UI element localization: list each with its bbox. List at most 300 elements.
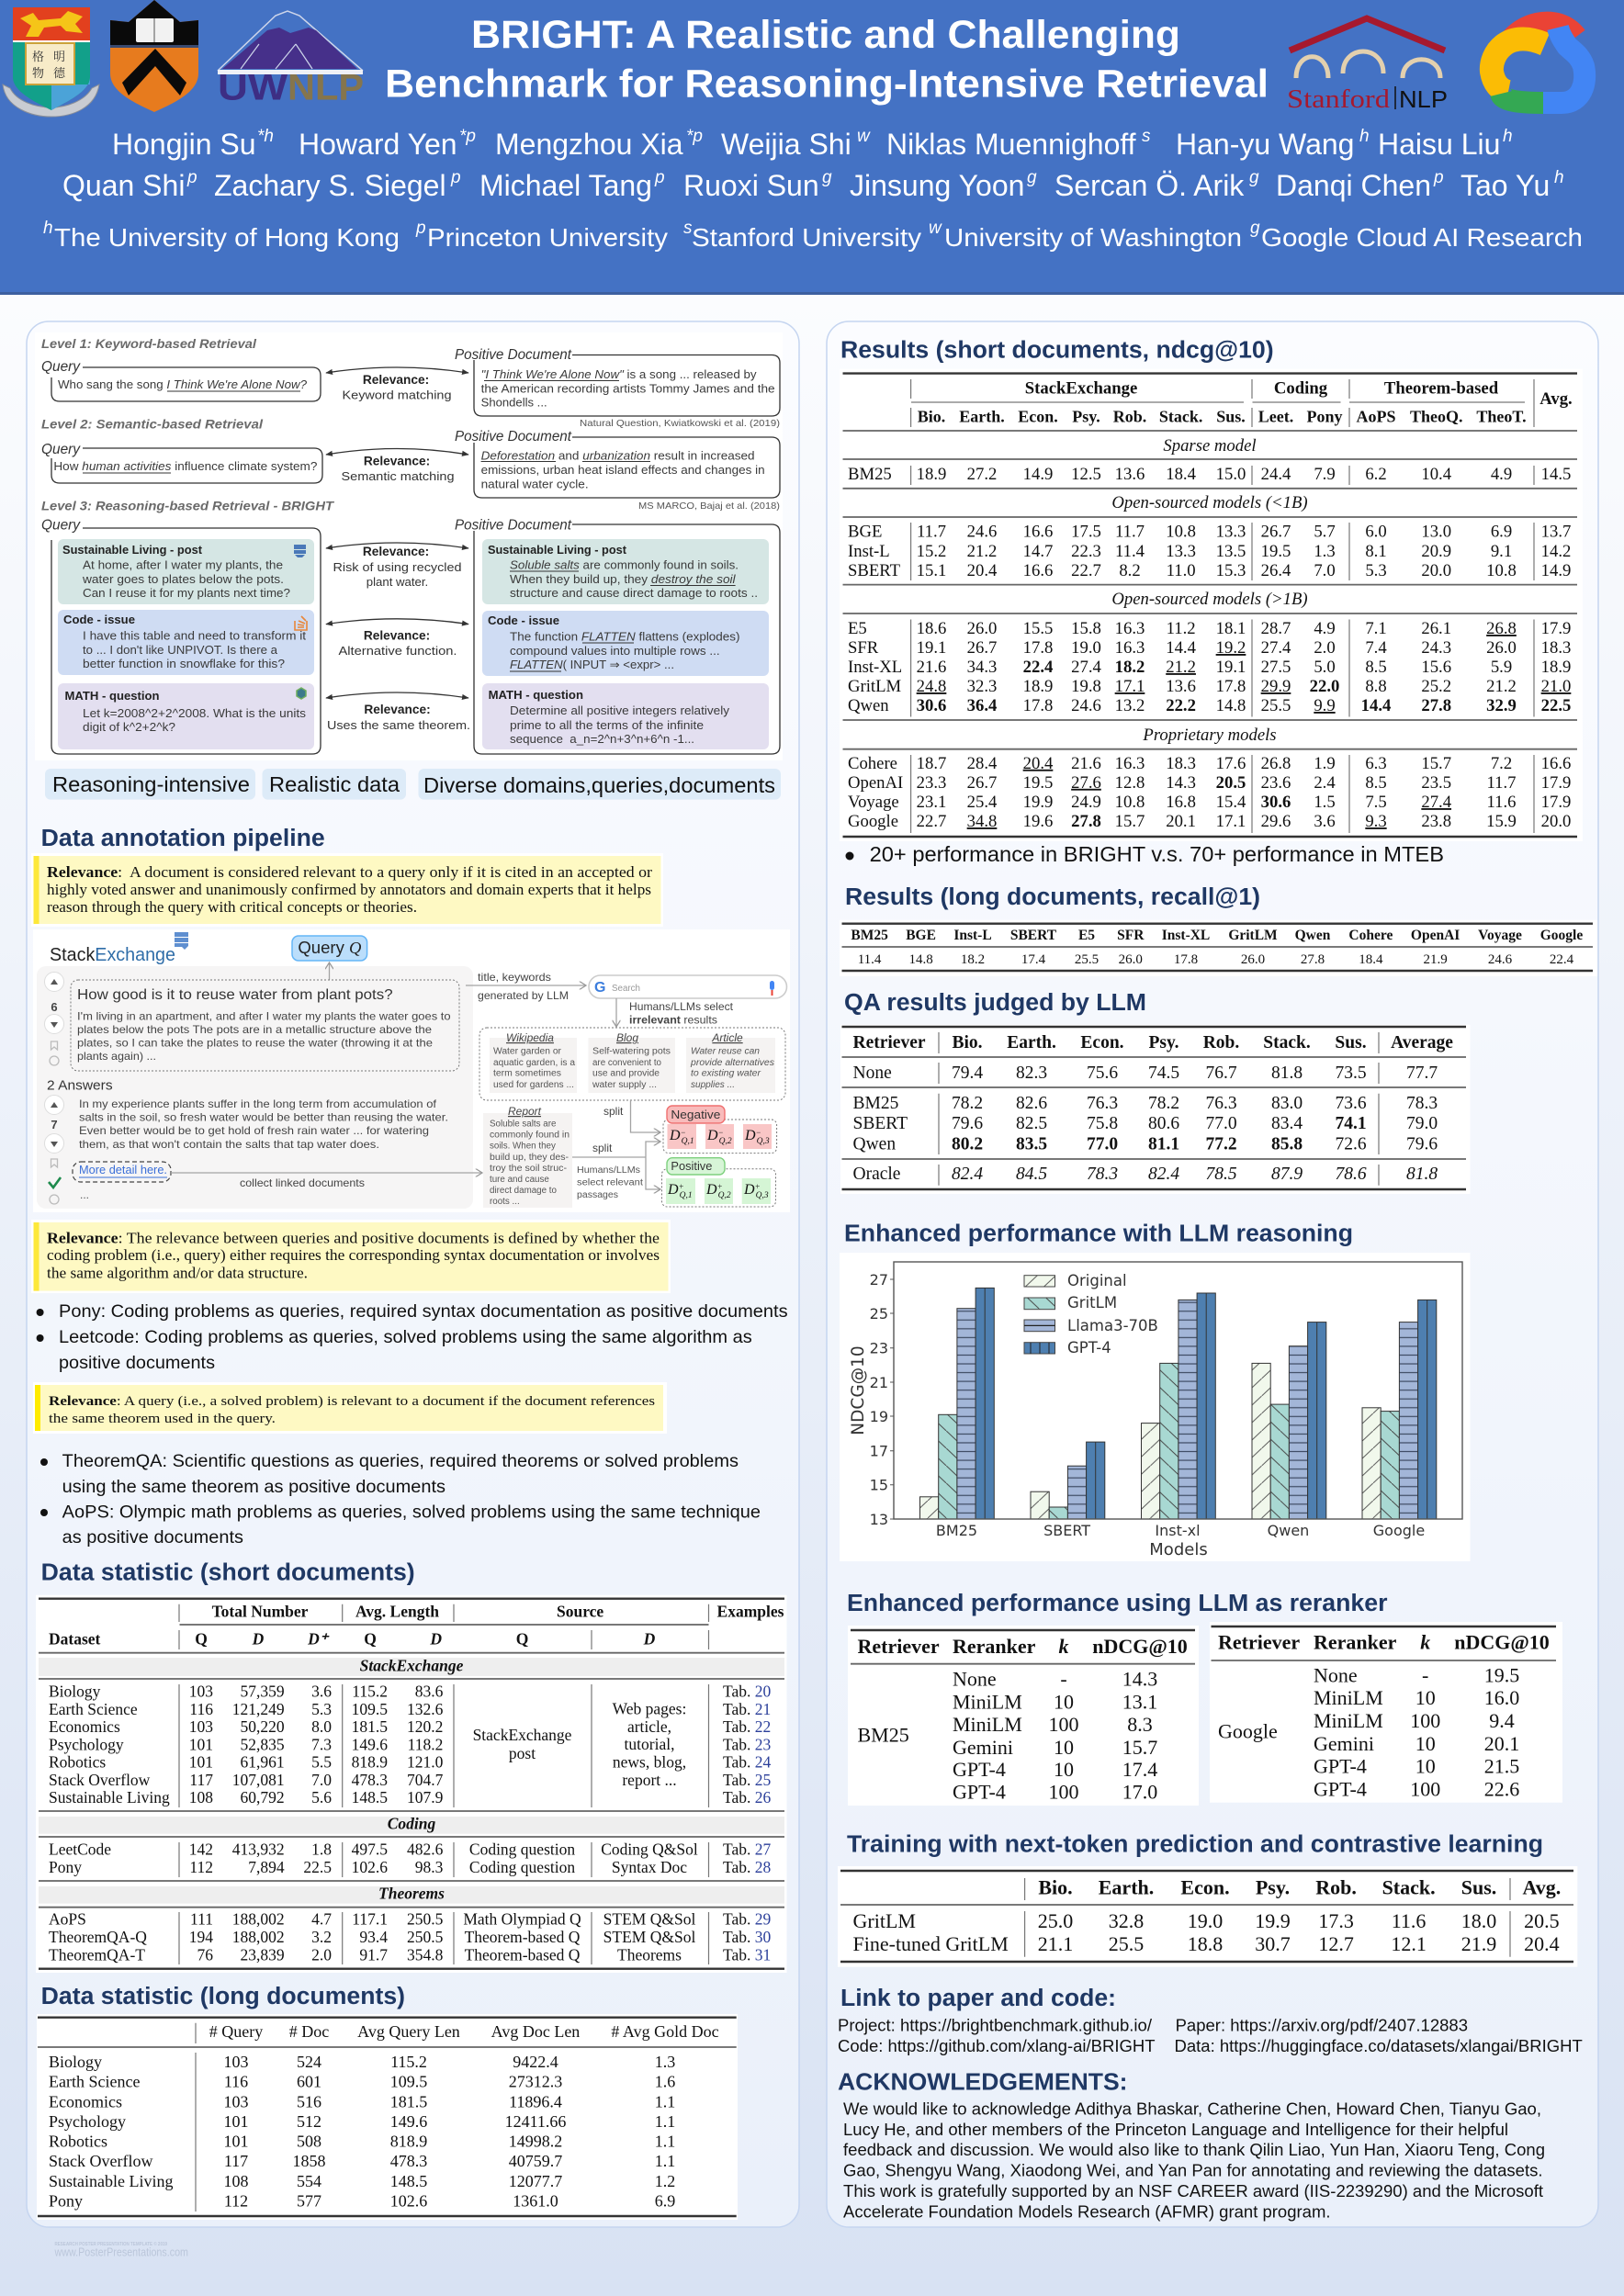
query card: code issue: better function in snowflake for this? xyxy=(83,658,285,670)
table: Google reranker: - xyxy=(1422,1664,1428,1687)
row: BM25: 24.4 xyxy=(1261,465,1291,484)
table: results short documents ndcg@10: Theorem-based xyxy=(1384,378,1499,399)
rows: proprietary models: 15.4 xyxy=(1216,793,1246,812)
level 2: MS MARCO, Bajaj et al. (2018) xyxy=(638,501,780,512)
level 3: Level 3: Reasoning-based Retrieval - BRIGHT xyxy=(41,498,335,512)
table: Google reranker: 100 xyxy=(1410,1778,1440,1801)
level 2: Positive Document xyxy=(455,429,572,445)
bullets: TheoremQA and AoPS xyxy=(40,1451,761,1548)
rows: proprietary models: 1.5 xyxy=(1314,793,1336,812)
table: BM25 reranker: 15.7 xyxy=(1122,1736,1157,1759)
table: BM25 reranker: MiniLM xyxy=(953,1713,1022,1736)
rows: proprietary models: Cohere xyxy=(848,754,897,773)
rows: proprietary models: 9.3 xyxy=(1365,812,1387,831)
rows: coding datasets: Coding question xyxy=(469,1858,575,1876)
document card: sustainable living: structure and cause direct damage to roots .. xyxy=(510,587,758,600)
rows: open-sourced models over 1B: 14.8 xyxy=(1216,696,1246,715)
table: data statistic long documents: 14998.2 xyxy=(509,2133,562,2151)
table: QA results judged by LLM: 80.2 xyxy=(952,1135,983,1154)
rows: StackExchange datasets xyxy=(49,1683,772,1806)
rows: proprietary models: 27.4 xyxy=(1421,793,1452,812)
table: data statistic long documents: 601 xyxy=(297,2073,321,2091)
positive documents: D xyxy=(706,1182,717,1198)
table: results long documents recall@1: Voyage xyxy=(1478,928,1522,943)
table: results long documents recall@1: 22.4 xyxy=(1550,952,1574,967)
table: Google reranker: MiniLM xyxy=(1314,1686,1383,1709)
table: QA results judged by LLM: Sus. xyxy=(1335,1033,1367,1052)
rows: coding datasets: 22.5 xyxy=(303,1858,332,1876)
table: data statistic long documents: Stack Overflow xyxy=(49,2152,152,2170)
rows: StackExchange datasets: 478.3 xyxy=(352,1771,388,1789)
table: Google reranker: Reranker xyxy=(1314,1631,1397,1654)
rows: open-sourced models over 1B: 18.6 xyxy=(917,619,946,638)
table: BM25 reranker xyxy=(848,1626,1199,1806)
rows: StackExchange datasets: Web pages: xyxy=(613,1700,686,1718)
rows: StackExchange datasets: tutorial, xyxy=(625,1735,674,1753)
callout: relevance definition: highly voted answer and unanimously confirmed by annotators and domain experts that it helps xyxy=(47,881,651,898)
rows: open-sourced models over 1B: 15.8 xyxy=(1071,619,1101,638)
heading: links: Link to paper and code: xyxy=(840,1986,1116,2011)
x axis: Google xyxy=(1373,1522,1425,1539)
rows: open-sourced models over 1B: Qwen xyxy=(848,696,889,715)
table: data statistic long documents: 512 xyxy=(297,2112,321,2131)
table: Google reranker xyxy=(1210,1622,1562,1803)
table: results long documents recall@1: Inst-L xyxy=(953,928,992,943)
title: Benchmark for Reasoning-Intensive Retrieval xyxy=(385,62,1269,107)
rows: open-sourced models under 1B: 11.0 xyxy=(1167,561,1196,580)
table: QA results judged by LLM: 75.8 xyxy=(1087,1114,1118,1133)
rows: proprietary models: 7.5 xyxy=(1365,793,1387,812)
rows: proprietary models: 25.4 xyxy=(967,793,998,812)
irrelevant results: used for gardens ... xyxy=(493,1080,574,1090)
query card: sustainable living: Can I reuse it for my plants next time? xyxy=(83,587,290,600)
rows: open-sourced models under 1B: 26.7 xyxy=(1261,523,1291,542)
answers: them, as that won't contain the salts that tap water does. xyxy=(79,1138,379,1151)
rows: theorem datasets: 117.1 xyxy=(352,1910,388,1929)
rows: open-sourced models under 1B: 13.3 xyxy=(1216,523,1246,542)
table: QA results judged by LLM: 83.4 xyxy=(1271,1114,1303,1133)
rows: proprietary models: 29.6 xyxy=(1261,812,1291,831)
rows: StackExchange datasets: Tab. 26 xyxy=(723,1788,772,1806)
authors line 2: p xyxy=(654,168,665,187)
rows: proprietary models: 17.1 xyxy=(1216,812,1246,831)
table: data statistic long documents: 148.5 xyxy=(390,2172,427,2190)
table: Google reranker: MiniLM xyxy=(1314,1709,1383,1732)
rows: coding datasets: Syntax Doc xyxy=(612,1858,687,1876)
rows: open-sourced models under 1B: 5.7 xyxy=(1314,523,1336,542)
table: QA results judged by LLM: BM25 xyxy=(852,1094,898,1113)
rows: open-sourced models over 1B: 13.2 xyxy=(1115,696,1145,715)
relevance: recycled water xyxy=(326,543,468,589)
table: training comparison: Earth. xyxy=(1099,1876,1154,1899)
rows: proprietary models: 20.0 xyxy=(1541,812,1571,831)
rows: coding datasets: 102.6 xyxy=(352,1858,388,1876)
table: training comparison: 18.0 xyxy=(1461,1909,1496,1932)
level 1: Who sang the song I Think We're Alone Now? xyxy=(58,378,307,391)
table: data statistic long documents: 9422.4 xyxy=(513,2053,558,2071)
table: Google reranker: 16.0 xyxy=(1484,1686,1519,1709)
rows: StackExchange datasets: 8.0 xyxy=(311,1717,332,1736)
rows: open-sourced models over 1B: 26.0 xyxy=(1486,638,1517,658)
table: data statistic short documents: D xyxy=(429,1630,442,1649)
row: BM25: 10.4 xyxy=(1421,465,1452,484)
rows: open-sourced models over 1B: 26.8 xyxy=(1486,619,1517,638)
rows: theorem datasets: 23,839 xyxy=(240,1945,285,1964)
authors line 1 xyxy=(112,127,1513,161)
table: QA results judged by LLM: 77.7 xyxy=(1406,1064,1438,1083)
table: QA results judged by LLM: Bio. xyxy=(952,1033,983,1052)
rows: open-sourced models over 1B: 24.6 xyxy=(1071,696,1101,715)
table: QA results judged by LLM: 77.0 xyxy=(1087,1135,1118,1154)
rows: proprietary models: 10.8 xyxy=(1115,793,1145,812)
figure: annotation pipeline xyxy=(33,929,790,1212)
rows: open-sourced models over 1B: 19.0 xyxy=(1071,638,1101,658)
rows: open-sourced models over 1B: 18.2 xyxy=(1115,658,1145,677)
rows: StackExchange datasets: Tab. 23 xyxy=(723,1735,772,1753)
header banner xyxy=(0,0,1624,295)
rows: open-sourced models under 1B: 11.7 xyxy=(917,523,946,542)
table: results short documents ndcg@10 xyxy=(840,369,1583,841)
logo: Stanford NLP xyxy=(1287,18,1448,114)
rows: StackExchange datasets: 121.0 xyxy=(407,1753,444,1772)
negative documents: Negative xyxy=(671,1108,720,1121)
heading: results long documents: Results (long documents, recall@1) xyxy=(845,884,1260,910)
vote controls: 7 xyxy=(51,1118,58,1131)
logo: UW NLP: UW xyxy=(218,68,288,108)
query card: math question: MATH - question xyxy=(64,690,160,703)
y axis: 21 xyxy=(870,1374,888,1391)
table: results short documents ndcg@10: StackExchange xyxy=(1025,378,1137,399)
search step xyxy=(466,971,786,1027)
rows: proprietary models: 16.3 xyxy=(1115,754,1145,773)
rows: open-sourced models over 1B: 9.9 xyxy=(1314,696,1336,715)
table: data statistic long documents: 6.9 xyxy=(655,2192,675,2211)
rows: StackExchange datasets: 5.6 xyxy=(311,1788,332,1806)
heading: LLM reranker: Enhanced performance using LLM as reranker xyxy=(847,1591,1388,1616)
rows: open-sourced models over 1B: 17.1 xyxy=(1115,677,1145,696)
authors line 1: Howard Yen xyxy=(299,128,457,161)
table: QA results judged by LLM: 76.7 xyxy=(1205,1064,1237,1083)
authors line 2: Jinsung Yoon xyxy=(850,169,1024,202)
table: data statistic short documents: Q xyxy=(195,1630,208,1649)
table: data statistic long documents: 102.6 xyxy=(390,2192,427,2211)
logo: Stanford NLP: Stanford xyxy=(1287,85,1390,114)
table: training comparison: Fine-tuned GritLM xyxy=(852,1932,1009,1955)
negative documents: − xyxy=(681,1128,686,1137)
rows: open-sourced models under 1B: 24.6 xyxy=(967,523,997,542)
rows: proprietary models: Voyage xyxy=(848,793,899,812)
table: data statistic long documents: 101 xyxy=(224,2133,248,2151)
authors line 2: Danqi Chen xyxy=(1276,169,1431,202)
bars: BM25 xyxy=(920,1288,994,1519)
table: Google reranker: GPT-4 xyxy=(1314,1755,1367,1778)
rows: StackExchange datasets: 3.6 xyxy=(311,1683,332,1701)
table: data statistic long documents: # Doc xyxy=(289,2022,329,2041)
table: results short documents ndcg@10: Proprietary models xyxy=(1142,726,1277,745)
table: training comparison: 18.8 xyxy=(1188,1932,1223,1955)
table: QA results judged by LLM: SBERT xyxy=(852,1114,908,1133)
tag: reasoning-intensive: Reasoning-intensive xyxy=(52,772,250,796)
table: data statistic short documents: StackExchange xyxy=(360,1656,464,1674)
rows: proprietary models: 27.8 xyxy=(1071,812,1101,831)
report document xyxy=(483,1105,572,1208)
callout: relevance definition xyxy=(31,853,663,927)
table: data statistic short documents: D⁺ xyxy=(307,1630,330,1649)
figure: three levels of retrieval xyxy=(35,332,783,760)
report document: soils. When they xyxy=(490,1142,556,1152)
negative documents: − xyxy=(756,1128,761,1137)
authors line 1: s xyxy=(1142,127,1151,146)
rows: proprietary models: 19.6 xyxy=(1023,812,1053,831)
rows: open-sourced models over 1B: 22.4 xyxy=(1023,658,1053,677)
table: BM25 reranker: 17.4 xyxy=(1122,1758,1157,1781)
table: training comparison: 25.0 xyxy=(1038,1909,1073,1932)
table: Google reranker: Google xyxy=(1218,1720,1278,1743)
table: training comparison: 20.4 xyxy=(1524,1932,1560,1955)
acknowledgements text: We would like to acknowledge Adithya Bhaskar, Catherine Chen, Howard Chen, Tianyu Gao, xyxy=(843,2099,1541,2119)
x axis xyxy=(936,1522,1425,1559)
document card: math question: sequence a_n=2^n+3^n+6^n -1... xyxy=(510,733,694,746)
rows: theorem datasets: Theorem-based Q xyxy=(465,1928,581,1946)
table: QA results judged by LLM: 83.5 xyxy=(1016,1135,1047,1154)
rows: theorem datasets: 76 xyxy=(197,1945,213,1964)
question post: How good is it to reuse water from plant pots? xyxy=(77,987,393,1003)
table: training comparison: Bio. xyxy=(1038,1876,1073,1899)
table: data statistic long documents: 116 xyxy=(224,2073,248,2091)
table: Google reranker: nDCG@10 xyxy=(1454,1631,1550,1654)
legend: GritLM xyxy=(1067,1294,1117,1311)
table: QA results judged by LLM: 81.8 xyxy=(1271,1064,1303,1083)
table: training comparison: Stack. xyxy=(1382,1876,1436,1899)
table: results long documents recall@1: Cohere xyxy=(1348,928,1393,943)
document card: code issue xyxy=(482,611,769,676)
irrelevant results: Wikipedia xyxy=(506,1031,554,1044)
answers: In my experience plants suffer in the long term from accumulation of xyxy=(79,1097,437,1110)
rows: open-sourced models under 1B: 14.7 xyxy=(1023,542,1053,561)
rows: StackExchange datasets: 103 xyxy=(189,1717,213,1736)
level 1 xyxy=(41,336,780,429)
table: QA results judged by LLM: 79.6 xyxy=(952,1114,983,1133)
rows: theorem datasets: Math Olympiad Q xyxy=(463,1910,581,1929)
rows: StackExchange datasets: Tab. 25 xyxy=(723,1771,772,1789)
negative documents: Q,3 xyxy=(757,1137,770,1146)
query card: sustainable living xyxy=(58,539,314,604)
authors line 1: Haisu Liu xyxy=(1378,128,1500,161)
bullets: Pony and Leetcode: Pony: Coding problems as queries, required syntax documentation as positive documents xyxy=(59,1301,788,1322)
table: QA results judged by LLM: Qwen xyxy=(852,1135,896,1154)
rows: proprietary models: 16.6 xyxy=(1541,754,1571,773)
table: QA results judged by LLM: 82.6 xyxy=(1016,1094,1047,1113)
question post: plants again) ... xyxy=(77,1050,156,1063)
table: BM25 reranker: Retriever xyxy=(858,1635,940,1658)
bullets: TheoremQA and AoPS: AoPS: Olympic math problems as queries, solved problems using the same technique xyxy=(62,1503,761,1523)
rows: open-sourced models under 1B: 13.0 xyxy=(1421,523,1451,542)
report document: roots ... xyxy=(490,1197,520,1207)
rows: StackExchange datasets: 7.0 xyxy=(311,1771,332,1789)
relevance: same theorem xyxy=(326,692,470,732)
affiliations: h xyxy=(43,219,53,238)
rows: StackExchange datasets: 704.7 xyxy=(407,1771,444,1789)
level 2: Query xyxy=(41,442,81,457)
rows: StackExchange datasets: 103 xyxy=(189,1683,213,1701)
table: results long documents recall@1: 14.8 xyxy=(908,952,933,967)
x axis: BM25 xyxy=(936,1522,977,1539)
table: Google reranker: 22.6 xyxy=(1484,1778,1519,1801)
split arrows xyxy=(572,1100,660,1200)
table: results long documents recall@1: 26.0 xyxy=(1241,952,1265,967)
table: results long documents recall@1: Inst-XL xyxy=(1162,928,1210,943)
bullets: Pony and Leetcode: Leetcode: Coding problems as queries, solved problems using the same algorithm as xyxy=(59,1327,752,1347)
rows: proprietary models: 20.5 xyxy=(1216,773,1246,793)
x axis: SBERT xyxy=(1043,1522,1090,1539)
rows: open-sourced models over 1B: 14.4 xyxy=(1166,638,1197,658)
table: QA results judged by LLM: 74.1 xyxy=(1335,1114,1367,1133)
table: training comparison: 19.9 xyxy=(1255,1909,1291,1932)
rows: proprietary models: 11.6 xyxy=(1486,793,1517,812)
affiliations: g xyxy=(1250,219,1260,238)
rows: coding datasets xyxy=(49,1840,772,1876)
level 1: Query xyxy=(41,359,81,375)
affiliations: Stanford University xyxy=(692,223,921,252)
callout: theorem relevance xyxy=(33,1382,667,1434)
table: data statistic long documents: 103 xyxy=(224,2092,248,2110)
y axis: 13 xyxy=(870,1511,888,1528)
table: training comparison: Psy. xyxy=(1256,1876,1290,1899)
rows: open-sourced models under 1B: 5.3 xyxy=(1365,561,1387,580)
rows: theorem datasets: 2.0 xyxy=(311,1945,332,1964)
heading: training: Training with next-token prediction and contrastive learning xyxy=(847,1832,1543,1858)
rows: open-sourced models under 1B: 14.9 xyxy=(1541,561,1571,580)
rows: open-sourced models over 1B: E5 xyxy=(848,619,867,638)
table: results short documents ndcg@10: Stack. xyxy=(1159,408,1202,426)
table: QA results judged by LLM: 83.0 xyxy=(1271,1094,1303,1113)
table: data statistic long documents: Pony xyxy=(49,2192,83,2211)
rows: proprietary models: 3.6 xyxy=(1314,812,1336,831)
table: training comparison xyxy=(838,1866,1577,1967)
table: training comparison: 12.7 xyxy=(1318,1932,1354,1955)
y axis: NDCG@10 xyxy=(849,1345,868,1435)
table: results long documents recall@1: 18.4 xyxy=(1359,952,1383,967)
rows: theorem datasets: 354.8 xyxy=(407,1945,444,1964)
table: data statistic short documents: Dataset xyxy=(49,1630,101,1649)
rows: StackExchange datasets: 132.6 xyxy=(407,1700,444,1718)
table: data statistic short documents xyxy=(36,1595,786,1973)
rows: open-sourced models under 1B: 1.3 xyxy=(1314,542,1336,561)
rows: proprietary models: 18.3 xyxy=(1166,754,1196,773)
rows: proprietary models: 21.6 xyxy=(1071,754,1101,773)
rows: StackExchange datasets: 61,961 xyxy=(240,1753,285,1772)
table: BM25 reranker: 8.3 xyxy=(1127,1713,1153,1736)
document card: code issue: compound values into multiple rows ... xyxy=(510,645,720,658)
rows: theorem datasets: Tab. 30 xyxy=(723,1928,772,1946)
table: data statistic long documents: # Avg Gold Doc xyxy=(611,2022,719,2041)
rows: open-sourced models over 1B: 14.4 xyxy=(1361,696,1391,715)
table: QA results judged by LLM: 79.4 xyxy=(952,1064,983,1083)
table: data statistic short documents: Examples xyxy=(717,1603,784,1621)
row: BM25: 18.4 xyxy=(1166,465,1197,484)
rows: open-sourced models under 1B: SBERT xyxy=(848,561,901,580)
rows: open-sourced models over 1B: 28.7 xyxy=(1261,619,1291,638)
bullets: Pony and Leetcode: positive documents xyxy=(59,1353,215,1373)
level 2: Deforestation and urbanization result in increased xyxy=(481,449,755,462)
table: data statistic long documents: 40759.7 xyxy=(509,2152,562,2170)
rows: StackExchange datasets: 101 xyxy=(189,1753,213,1772)
report document: troy the soil struc- xyxy=(490,1164,567,1174)
table: results long documents recall@1: 25.5 xyxy=(1075,952,1099,967)
rows: open-sourced models under 1B: 7.0 xyxy=(1314,561,1336,580)
table: QA results judged by LLM: 84.5 xyxy=(1016,1165,1047,1184)
rows: StackExchange datasets: 107,081 xyxy=(232,1771,285,1789)
table: data statistic long documents: 117 xyxy=(224,2152,248,2170)
table: data statistic long documents: 524 xyxy=(297,2053,321,2071)
footer credit xyxy=(54,2241,188,2259)
rows: coding datasets: 482.6 xyxy=(407,1840,444,1859)
query card: code issue: to ... I don't like UNPIVOT. Is there a xyxy=(83,644,277,657)
table: results long documents recall@1: Google xyxy=(1540,928,1583,943)
document card: sustainable living: Sustainable Living - post xyxy=(488,544,627,557)
table: data statistic long documents: 112 xyxy=(224,2192,248,2211)
authors line 2 xyxy=(62,168,1564,202)
table: BM25 reranker: GPT-4 xyxy=(953,1758,1006,1781)
table: results long documents recall@1: GritLM xyxy=(1228,928,1278,943)
bars: Google xyxy=(1362,1300,1437,1519)
row: BM25: BM25 xyxy=(848,465,892,484)
report document: Soluble salts are xyxy=(490,1120,557,1130)
authors line 1: h xyxy=(1503,127,1513,146)
relevance: alternative function xyxy=(326,619,468,658)
rows: proprietary models: 24.9 xyxy=(1071,793,1101,812)
rows: coding datasets: 1.8 xyxy=(311,1840,332,1859)
rows: open-sourced models under 1B: 11.4 xyxy=(1115,542,1145,561)
rows: StackExchange datasets: 121,249 xyxy=(232,1700,285,1718)
document card: sustainable living xyxy=(482,539,769,604)
rows: StackExchange datasets: 181.5 xyxy=(352,1717,388,1736)
table: data statistic long documents: 516 xyxy=(297,2092,321,2110)
rows: StackExchange datasets: 50,220 xyxy=(240,1717,285,1736)
rows: open-sourced models under 1B xyxy=(848,523,1571,580)
rows: theorem datasets: STEM Q&Sol xyxy=(603,1910,695,1929)
logo: University of Hong Kong crest xyxy=(3,7,99,117)
rows: theorem datasets: 194 xyxy=(189,1928,213,1946)
table: Google reranker: None xyxy=(1314,1664,1358,1687)
table: results long documents recall@1: 26.0 xyxy=(1119,952,1143,967)
query card: code issue: Code - issue xyxy=(63,613,135,626)
level 3 xyxy=(41,498,780,754)
table: QA results judged by LLM: 78.6 xyxy=(1335,1165,1367,1184)
callout: relevance definition: reason through the query with critical concepts or theories. xyxy=(47,898,417,916)
bullets: Pony and Leetcode xyxy=(37,1301,788,1373)
rows: theorem datasets: Tab. 31 xyxy=(723,1945,771,1964)
y axis: 27 xyxy=(870,1271,888,1289)
table: training comparison: 32.8 xyxy=(1109,1909,1144,1932)
rows: proprietary models: 14.3 xyxy=(1166,773,1196,793)
document card: math question xyxy=(482,683,769,749)
callout: coding relevance: Relevance : The relevance between queries and positive documents is defined by whether the xyxy=(47,1229,660,1246)
rows: StackExchange datasets: 117 xyxy=(189,1771,213,1789)
rows: proprietary models: 7.2 xyxy=(1491,754,1512,773)
table: data statistic long documents: Earth Science xyxy=(49,2073,140,2091)
bullets: TheoremQA and AoPS: using the same theorem as positive documents xyxy=(62,1477,445,1497)
affiliations: p xyxy=(415,219,426,238)
relevance: same theorem: Relevance: xyxy=(364,703,431,716)
rows: open-sourced models under 1B: 17.5 xyxy=(1071,523,1101,542)
answers: 2 Answers xyxy=(47,1078,113,1094)
rows: theorem datasets xyxy=(49,1910,772,1964)
table: results long documents recall@1: SBERT xyxy=(1010,928,1057,943)
logo: University of Hong Kong crest: 德 xyxy=(53,63,66,81)
table: results long documents recall@1: OpenAI xyxy=(1411,928,1460,943)
rows: proprietary models: 1.9 xyxy=(1314,754,1336,773)
